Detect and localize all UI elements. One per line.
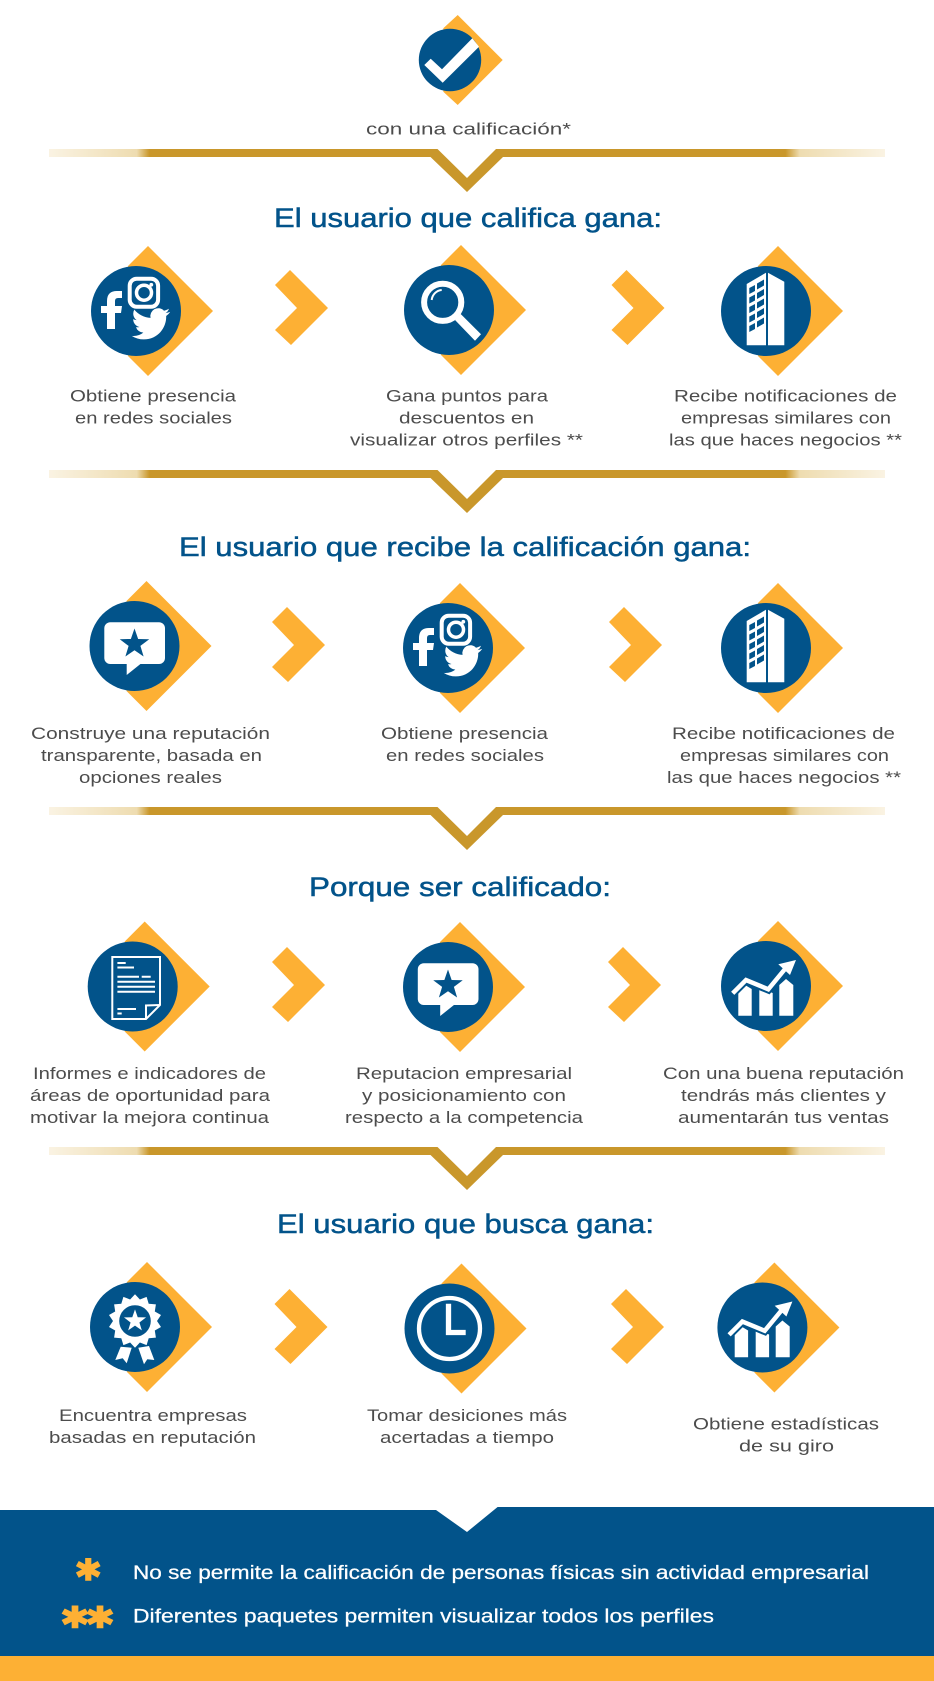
- step: redes sociales: [381, 583, 549, 765]
- step text: Encuentra empresas: [59, 1406, 247, 1425]
- panel: porque ser calificado: [30, 872, 904, 1127]
- step text: Reputacion empresarial: [356, 1064, 572, 1083]
- step text: áreas de oportunidad para: [30, 1086, 271, 1105]
- text: con una calificación: con una calificación*: [366, 119, 572, 138]
- step text: transparente, basada en: [41, 746, 262, 765]
- step text: opciones reales: [79, 768, 222, 787]
- step: redes sociales: [70, 246, 237, 427]
- step text: empresas similares con: [681, 408, 891, 427]
- step text: motivar la mejora continua: [30, 1108, 270, 1127]
- step text: Gana puntos para: [386, 386, 549, 405]
- heading: El usuario que califica gana:: [274, 203, 662, 233]
- step text: [350, 386, 583, 449]
- step text: y posicionamiento con: [362, 1086, 566, 1105]
- arrow: [272, 947, 325, 1022]
- heading: El usuario que busca gana:: [277, 1209, 654, 1239]
- note marker: one asterisk: *: [77, 1552, 100, 1602]
- arrow: [274, 1289, 328, 1364]
- step text: [70, 386, 237, 427]
- step: decisiones: [367, 1264, 567, 1447]
- arrow: [272, 607, 325, 682]
- heading: El usuario que recibe la calificación gana:: [179, 532, 751, 562]
- step: informes: [30, 922, 271, 1127]
- step text: visualizar otros perfiles **: [350, 430, 583, 449]
- step text: las que haces negocios **: [669, 430, 902, 449]
- note text 2: Diferentes paquetes permiten visualizar todos los perfiles: [133, 1606, 714, 1628]
- step: ventas: [663, 921, 904, 1127]
- divider 4: [49, 1147, 885, 1190]
- arrow: [609, 607, 662, 682]
- panel: el usuario que recibe la calificación gana: [31, 532, 901, 787]
- icon: growth chart: [717, 1262, 839, 1392]
- step text: las que haces negocios **: [667, 768, 901, 787]
- note marker: two asterisks: **: [62, 1599, 112, 1650]
- arrow: [608, 947, 661, 1022]
- step text: Obtiene estadísticas: [693, 1414, 879, 1433]
- step text: [367, 1406, 567, 1447]
- panel: footer notes: [0, 1507, 934, 1681]
- arrow: [612, 270, 664, 345]
- arrow: [611, 1289, 664, 1364]
- step text: respecto a la competencia: [345, 1108, 584, 1127]
- step text: [667, 724, 901, 787]
- step: puntos: [350, 245, 583, 449]
- step: empresas: [49, 1262, 256, 1447]
- footer accent band: [0, 1656, 934, 1681]
- step text: [30, 1064, 271, 1127]
- step text: [663, 1064, 904, 1127]
- icon: social networks: [403, 583, 525, 713]
- step text: Obtiene presencia: [70, 386, 237, 405]
- divider 2: [49, 470, 885, 513]
- icon: building: [721, 246, 843, 376]
- step: estadísticas: [693, 1262, 879, 1455]
- step text: Recibe notificaciones de: [674, 386, 897, 405]
- note text 1: No se permite la calificación de personas físicas sin actividad empresarial: [133, 1563, 869, 1584]
- icon: speech bubble with star: [90, 581, 212, 711]
- step text: Informes e indicadores de: [33, 1064, 266, 1083]
- icon: growth chart: [721, 921, 843, 1051]
- step: notificaciones: [669, 246, 902, 449]
- divider 3: [49, 807, 885, 850]
- panel: top rating intro: [366, 15, 572, 138]
- step text: [49, 1406, 256, 1447]
- icon: check mark: [419, 15, 503, 105]
- step text: [693, 1414, 879, 1455]
- step text: basadas en reputación: [49, 1428, 256, 1447]
- step text: [31, 724, 270, 787]
- icon: document: [88, 922, 210, 1052]
- step text: tendrás más clientes y: [681, 1086, 887, 1105]
- step text: de su giro: [739, 1436, 834, 1455]
- panel: el usuario que busca gana: [49, 1209, 879, 1455]
- step text: empresas similares con: [680, 746, 889, 765]
- step text: [669, 386, 902, 449]
- icon: social networks: [91, 246, 213, 376]
- step text: en redes sociales: [75, 408, 232, 427]
- icon: building: [721, 583, 843, 713]
- icon: clock: [404, 1264, 526, 1394]
- step text: aumentarán tus ventas: [678, 1108, 889, 1127]
- step text: en redes sociales: [386, 746, 544, 765]
- step text: [381, 724, 549, 765]
- icon: magnifier: [404, 245, 526, 375]
- step text: Recibe notificaciones de: [672, 724, 895, 743]
- step: notificaciones: [667, 583, 901, 787]
- step text: Obtiene presencia: [381, 724, 549, 743]
- footer background: [0, 1507, 934, 1656]
- step: reputación: [31, 581, 270, 787]
- step: reputación empresarial: [345, 922, 584, 1127]
- step text: Tomar desiciones más: [367, 1406, 567, 1425]
- divider 1: [49, 149, 885, 192]
- step text: descuentos en: [399, 408, 534, 427]
- icon: speech bubble with star: [403, 922, 525, 1052]
- arrow: [275, 270, 328, 345]
- step text: [345, 1064, 584, 1127]
- step text: Construye una reputación: [31, 724, 270, 743]
- panel: el usuario que califica gana: [70, 203, 902, 449]
- icon: medal: [90, 1262, 212, 1392]
- step text: acertadas a tiempo: [380, 1428, 554, 1447]
- step text: Con una buena reputación: [663, 1064, 904, 1083]
- heading: Porque ser calificado:: [309, 872, 611, 902]
